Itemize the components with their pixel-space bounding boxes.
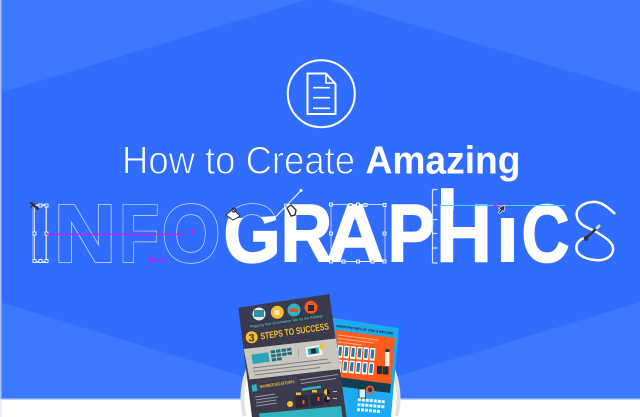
outlined letters I N F O: G: [224, 188, 280, 280]
mini chart: [294, 386, 324, 408]
grey circle behind posters: [242, 320, 398, 416]
selection box on A: [330, 203, 386, 263]
orange panel: [336, 330, 395, 384]
outlined letters I N F O: [28, 188, 281, 280]
outline inner knockout: [28, 188, 281, 280]
outlined letters I N F O: I: [28, 188, 51, 280]
teal band: [259, 406, 342, 417]
icon: paint bucket: [226, 208, 240, 220]
orange ring icon: [367, 386, 373, 393]
section text lines: [255, 374, 338, 406]
title: How to Create Amazing: Amazing: [366, 140, 520, 182]
small device: [359, 389, 366, 398]
outline inner knockout: F: [119, 188, 159, 280]
filled letters G R A P H i C: H: [436, 188, 492, 280]
panel text lines: [253, 359, 331, 375]
magenta guide line: [46, 229, 195, 263]
poster title: STEPS TO SUCCESS: [260, 321, 330, 342]
outline inner knockout: N: [54, 188, 116, 280]
filled letters G R A P H i C: i: [496, 188, 519, 280]
section heading: maximize: MAXIMIZE SEO EFFORTS: [259, 379, 295, 389]
bezier handle line: [274, 190, 302, 219]
filled letters G R A P H i C: A: [326, 188, 384, 280]
poster: blue and orange back sheet: [326, 318, 399, 417]
outline inner knockout: I: [28, 188, 51, 280]
mini pie charts: [287, 389, 337, 407]
title: How to Create Amazing: [122, 140, 520, 182]
ruler beside H: [432, 190, 438, 263]
small phone grid: [357, 398, 385, 413]
outlined letters I N F O: O: [162, 188, 220, 280]
cyan guide line: [441, 204, 565, 207]
icon: document in circle: [288, 60, 355, 127]
poster subheading: Prepping Your eCommerce Site for the Holidays: [249, 313, 323, 329]
filled letters G R A P H i C: [226, 188, 568, 264]
icon: arrow cursor: [498, 205, 505, 214]
icon: pen tool cursor: [31, 203, 38, 209]
filled letters G R A P H i C: P: [388, 188, 435, 280]
poster heading: SMARTPHONES OF 2016 & BEYOND: [336, 324, 394, 336]
poster icons row: [252, 301, 318, 320]
filled letters G R A P H i C: G: [224, 188, 280, 280]
panel infographic devices: [251, 344, 324, 364]
selection box on I: [33, 204, 48, 262]
grey panel: [244, 338, 341, 380]
dark band: [337, 377, 391, 393]
poster: dark front sheet: [238, 294, 346, 417]
title: How to Create Amazing: How to Create: [122, 140, 355, 182]
outline inner knockout: O: [162, 188, 220, 280]
poster number badge: 3: [248, 332, 255, 344]
phone grid: [336, 345, 376, 375]
heading: INFOGRAPHICS lettering: [32, 188, 616, 264]
panel text lines: [338, 335, 378, 345]
device column: [377, 349, 390, 374]
outlined letters I N F O: F: [119, 188, 159, 280]
filled letters G R A P H i C: R: [280, 188, 332, 280]
outlined letters I N F O: N: [54, 188, 116, 280]
filled letters G R A P H i C: C: [522, 188, 570, 280]
icon: hand cursor: [287, 205, 296, 216]
icon: paint brush: [584, 226, 599, 241]
outline inner knockout: G: [224, 188, 280, 280]
